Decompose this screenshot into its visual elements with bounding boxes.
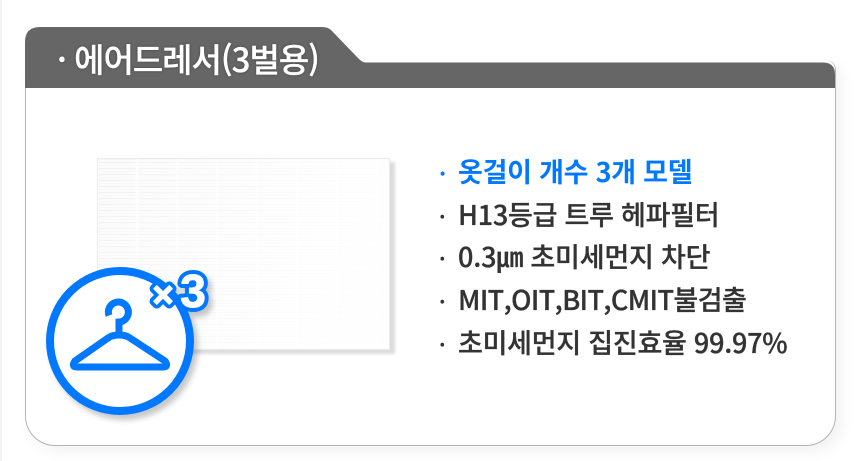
filter image	[97, 158, 390, 350]
header tab shape	[25, 27, 835, 88]
feature: efficiency: ·	[439, 328, 446, 360]
icon: hanger badge x3: 3	[180, 265, 206, 317]
highlighted feature: 옷걸이 개수 3개 모델	[458, 151, 692, 190]
icon: hanger badge x3	[46, 265, 216, 423]
icon: hanger badge x3: ×	[152, 274, 174, 315]
feature: HEPA filter: H13등급 트루 헤파필터	[458, 194, 719, 233]
highlighted feature: ·	[439, 157, 446, 189]
feature: fine dust block: 0.3㎛ 초미세먼지 차단	[458, 236, 710, 275]
feature: chemicals: ·	[439, 285, 446, 317]
panel: air dresser card	[25, 60, 836, 446]
feature list	[439, 151, 787, 361]
feature: HEPA filter: ·	[439, 200, 446, 232]
feature: efficiency: 초미세먼지 집진효율 99.97%	[458, 322, 787, 361]
feature: chemicals: MIT,OIT,BIT,CMIT불검출	[458, 279, 746, 318]
icon: hanger badge x3: ×	[152, 274, 174, 315]
icon: hanger badge x3: 3	[180, 265, 206, 317]
title: · 에어드레서(3벌용)	[57, 34, 319, 82]
feature: fine dust block: ·	[439, 242, 446, 274]
